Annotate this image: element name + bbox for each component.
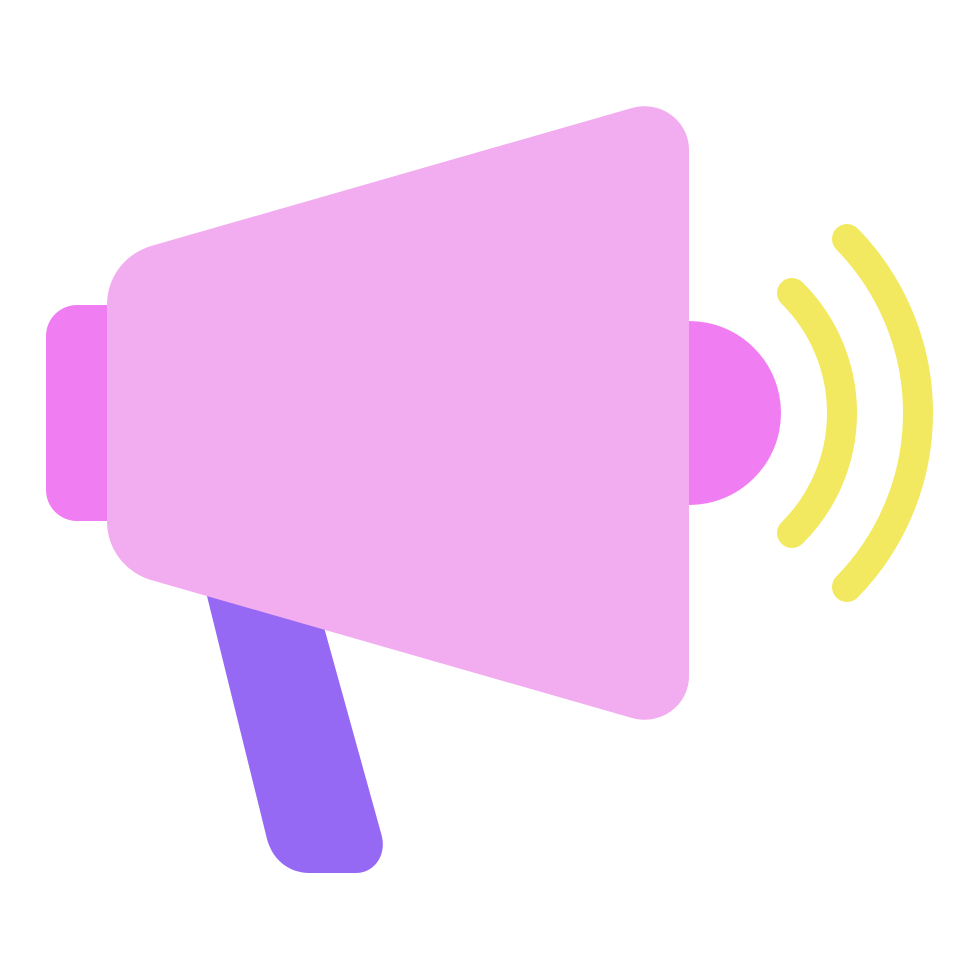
inner sound wave xyxy=(792,293,842,533)
megaphone body xyxy=(107,106,689,720)
outer sound wave xyxy=(847,239,918,587)
handle xyxy=(205,588,383,873)
back cap xyxy=(46,305,125,521)
front dome xyxy=(680,321,781,505)
